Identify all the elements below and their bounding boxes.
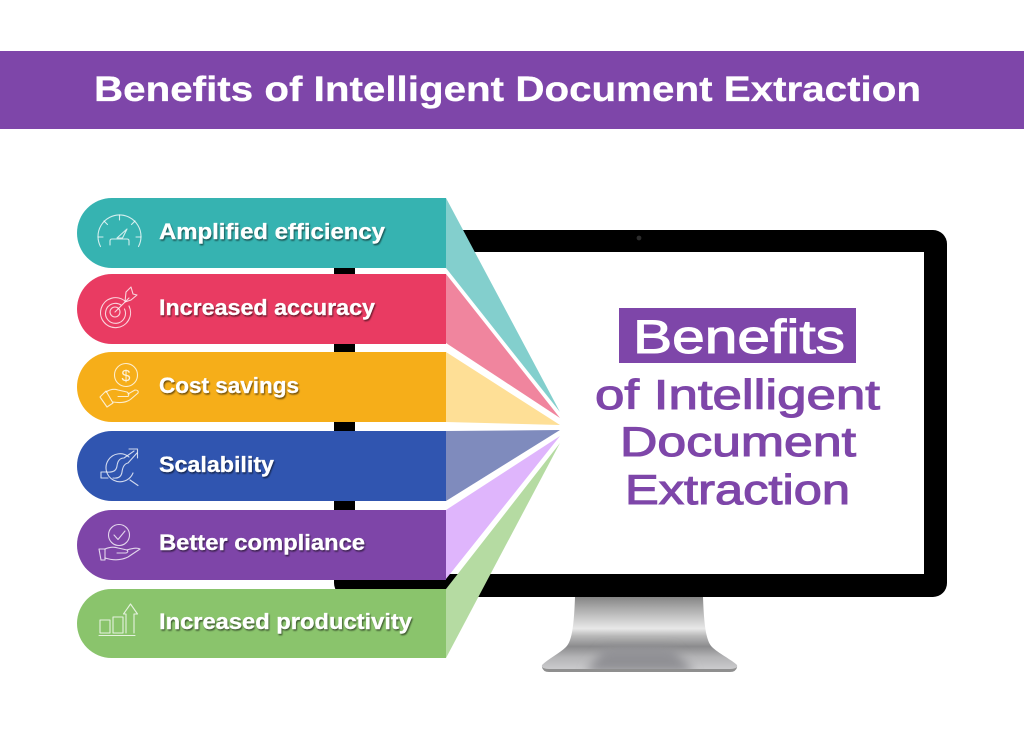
item: scalability	[77, 431, 446, 501]
label: Better compliance	[159, 530, 365, 555]
label: Increased accuracy	[159, 295, 376, 320]
label: Cost savings	[159, 373, 299, 398]
title: Benefits of Intelligent Document Extraction	[94, 70, 921, 109]
monitor screen	[355, 252, 924, 574]
monitor	[334, 230, 947, 672]
item: cost savings	[77, 352, 446, 422]
icon: target	[101, 287, 137, 328]
fan: green	[446, 443, 560, 658]
monitor frame	[334, 230, 947, 597]
heading: Benefits: Benefits	[633, 310, 845, 363]
icon: check in hand	[99, 524, 140, 560]
icon: bars with arrow	[99, 604, 138, 636]
heading: of Intelligent: of Intelligent	[595, 371, 880, 418]
heading highlight	[619, 308, 856, 363]
item: increased accuracy	[77, 274, 446, 344]
fan: teal	[446, 198, 560, 412]
fan connectors	[446, 198, 560, 658]
camera	[637, 236, 641, 240]
monitor stand	[542, 597, 737, 672]
label: Scalability	[159, 452, 275, 477]
label: Increased productivity	[159, 609, 413, 634]
icon: coin in hand: $	[122, 368, 131, 385]
heading: Extraction: Extraction	[625, 466, 850, 513]
screen heading	[595, 308, 880, 513]
icon: coin in hand	[100, 364, 138, 407]
fan: purple	[446, 436, 560, 579]
title banner	[0, 51, 1024, 129]
fan: yellow	[446, 352, 560, 425]
label: Amplified efficiency	[159, 219, 386, 244]
item: increased productivity	[77, 589, 446, 658]
icon: speedometer	[98, 215, 141, 246]
fan: pink	[446, 274, 560, 418]
fan: blue	[446, 430, 560, 501]
icon: magnifier with growth arrow	[101, 449, 138, 486]
item: amplified efficiency	[77, 198, 446, 268]
heading: Document: Document	[620, 418, 856, 465]
item: better compliance	[77, 510, 446, 580]
